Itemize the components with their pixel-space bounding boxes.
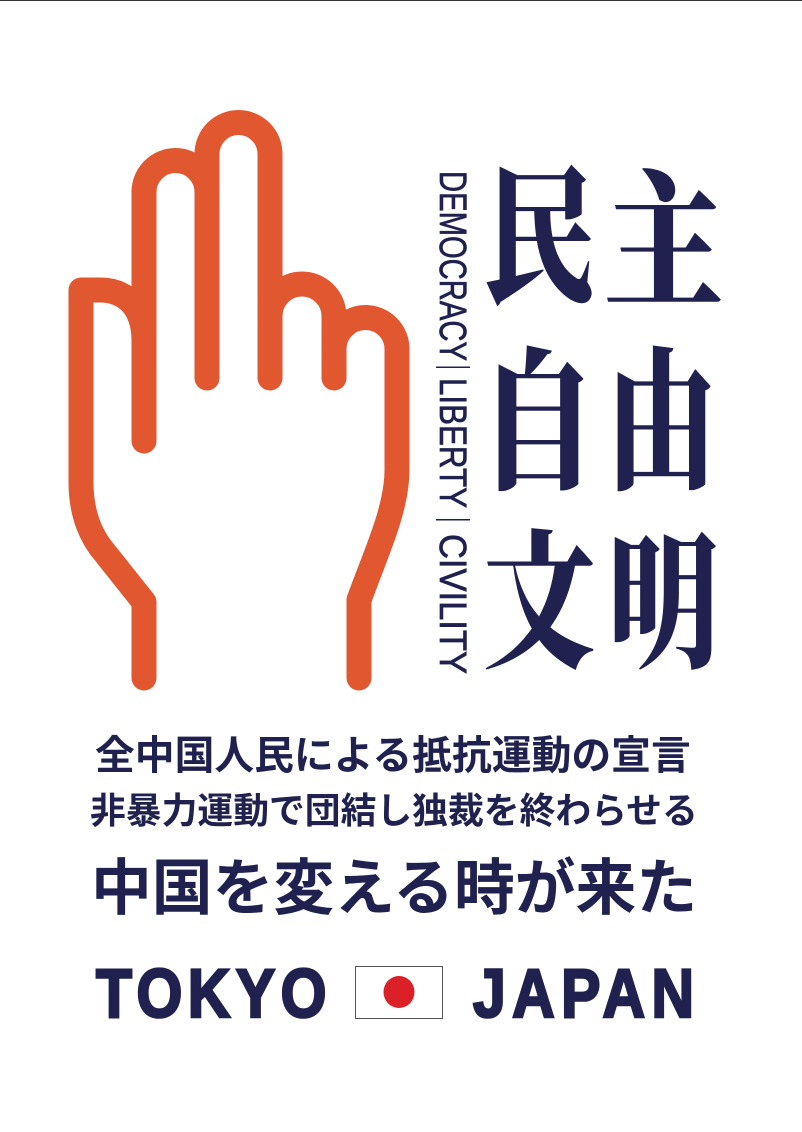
vertical English tagline: CIVILITY <box>431 534 473 674</box>
large kanji: 民主 自由 文明: 民 <box>483 120 595 335</box>
large kanji: 民主 自由 文明 <box>478 120 724 699</box>
large kanji: 民主 自由 文明: 自 <box>478 301 597 522</box>
icon: Japanese flag <box>356 966 442 1018</box>
vertical English tagline: DEMOCRACY <box>431 171 473 361</box>
TOKYO label: TOKYO <box>96 955 326 1032</box>
headline line 2: 非暴力運動で団結し独裁を終わらせる <box>90 791 698 831</box>
large kanji: 民主 自由 文明: 由 <box>607 299 717 521</box>
large kanji: 民主 自由 文明: 文 <box>483 484 597 699</box>
icon: three-finger salute hand <box>81 123 397 678</box>
JAPAN label: JAPAN <box>473 955 694 1032</box>
headline line 1: 全中国人民による抵抗運動の宣言 <box>95 734 691 778</box>
vertical English tagline <box>431 171 473 674</box>
vertical English tagline: LIBERTY <box>431 378 473 508</box>
headline line 3: 中国を変える時が来た <box>91 854 697 922</box>
large kanji: 民主 自由 文明: 主 <box>604 123 724 338</box>
large kanji: 民主 自由 文明: 明 <box>607 488 719 699</box>
